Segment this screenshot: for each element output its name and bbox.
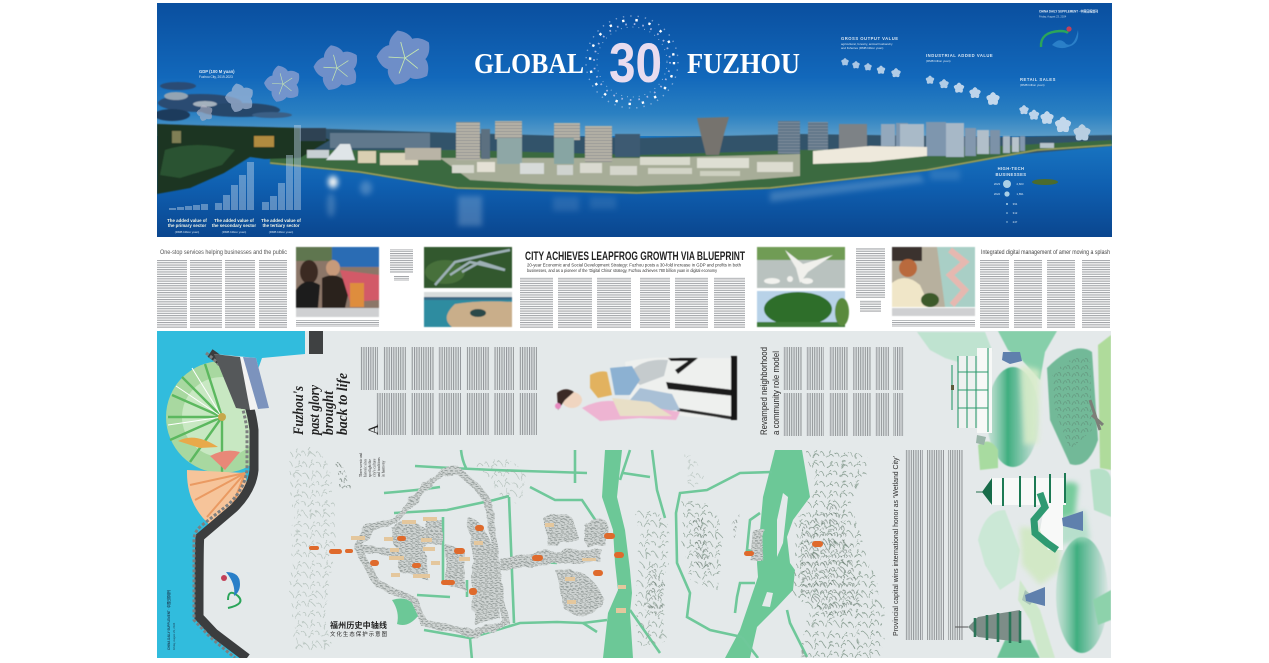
heading: past glory: Fuzhou's xyxy=(291,386,307,436)
wall gate tower xyxy=(309,331,323,354)
gross output value: GROSS OUTPUT VALUE xyxy=(841,36,899,41)
mountains xyxy=(290,448,885,658)
green umbrella xyxy=(166,362,250,472)
photo: coastline xyxy=(424,292,512,327)
bar chart captions: (RMB billion yuan) xyxy=(175,230,199,234)
GDP flower chart xyxy=(196,30,430,121)
subheading: 20-year Economic and Social Development Strategy: Fuzhou posts a 30-fold increase in GDP and profits in both xyxy=(527,262,742,268)
sky xyxy=(157,3,1112,138)
GDP label: GDP (100 M yuan) xyxy=(199,69,235,74)
panel: illustrated map page xyxy=(157,331,1111,660)
bar chart captions xyxy=(167,218,301,234)
quote right xyxy=(856,248,885,312)
bar chart captions: The added value of xyxy=(167,218,207,223)
masthead and logo: Friday, August 23, 2024 xyxy=(1039,14,1067,18)
illustration: two women in hanfu xyxy=(555,356,737,421)
tower blocks centre xyxy=(452,121,640,175)
bar chart captions: the tertiary sector xyxy=(262,223,300,228)
article left: One-stop services helping businesses and the public xyxy=(160,249,287,256)
subheading: businesses, and as a pioneer of the ‘Digital China’ strategy, Fuzhou achieves 780 billion yuan in digital economy xyxy=(527,268,718,273)
gross output value: and fisheries (RMB billion yuan) xyxy=(841,46,883,50)
crown tower xyxy=(697,117,729,155)
title: GLOBAL xyxy=(474,48,584,80)
bar chart captions: The added value of xyxy=(214,218,254,223)
fireworks ring xyxy=(586,16,678,108)
heading: past glory: brought xyxy=(321,390,337,435)
high-tech businesses: 2022 xyxy=(994,192,1001,196)
panel: middle newspaper strip xyxy=(157,247,1110,328)
title xyxy=(475,54,800,74)
islet xyxy=(1032,179,1058,185)
page background xyxy=(157,331,1111,658)
retail sales xyxy=(1019,77,1092,143)
heading: revamped neighborhood xyxy=(759,347,781,435)
article right: Integrated digital management of amer moving a splash xyxy=(981,249,1110,256)
heading: past glory xyxy=(291,372,351,437)
retail sales: (RMB billion yuan) xyxy=(1020,83,1045,87)
high-tech businesses: 247 xyxy=(1013,220,1018,224)
roads xyxy=(384,450,807,660)
high-tech businesses: BUSINESSES xyxy=(996,172,1026,177)
soft green hills xyxy=(917,332,992,380)
wave wall xyxy=(1034,493,1063,550)
white pagoda xyxy=(976,473,1066,507)
GDP label: Fuzhou City, 2019-2023 xyxy=(199,75,233,79)
bar charts xyxy=(169,125,301,210)
30: 30 xyxy=(609,31,662,94)
high-tech businesses: 2,603 xyxy=(1016,182,1024,186)
photo: painting workshop xyxy=(892,247,975,316)
masthead and logo: CHINA DAILY SUPPLEMENT · 中国日报增刊 xyxy=(1039,8,1099,14)
standfirst: Three scenic and xyxy=(359,452,363,477)
article: revamped neighborhood xyxy=(783,347,904,436)
photo: banyan tree xyxy=(757,291,849,327)
left hillside xyxy=(157,124,330,194)
bar chart captions: The added value of xyxy=(261,218,301,223)
blue place labels xyxy=(1002,352,1083,606)
bar chart captions: (RMB billion yuan) xyxy=(222,230,246,234)
terraces and east towers xyxy=(640,121,1054,176)
drop capital: A xyxy=(366,424,382,435)
terrace base xyxy=(440,154,800,186)
city photo layer xyxy=(154,82,1112,194)
gross output value: agricultural, forestry, animal husbandry xyxy=(841,42,893,46)
masthead and logo xyxy=(1039,8,1099,48)
orange place tags xyxy=(309,525,823,620)
photo caption left xyxy=(296,320,379,327)
land behind the shoreline xyxy=(270,140,1112,194)
heading: past glory: past glory xyxy=(307,385,323,437)
grey pagoda xyxy=(955,610,1020,643)
heading: revamped neighborhood: Revamped neighborhood xyxy=(759,347,769,435)
title: FUZHOU xyxy=(687,48,800,80)
bar chart captions: the primary sector xyxy=(168,223,206,228)
rivers xyxy=(602,450,633,658)
GDP label xyxy=(199,69,235,79)
article left xyxy=(157,249,287,328)
map title: 文化生态保护示意图 xyxy=(330,630,387,638)
map title: 福州历史中轴线 xyxy=(330,620,387,630)
industrial added value xyxy=(925,53,1001,106)
map xyxy=(290,448,885,660)
water xyxy=(157,136,1112,237)
high-tech businesses: 312 xyxy=(1013,211,1018,215)
standfirst: spotlight the xyxy=(368,459,372,477)
city urban texture xyxy=(357,470,610,633)
white pavilion xyxy=(951,348,992,433)
city wall xyxy=(199,353,254,658)
park pond xyxy=(392,599,418,625)
big tree xyxy=(1047,348,1098,465)
heading: past glory: back to life xyxy=(335,372,351,435)
high-tech businesses: 2023 xyxy=(994,182,1001,186)
subheading xyxy=(527,262,742,273)
article: wetland city xyxy=(905,450,963,640)
map title xyxy=(330,620,387,638)
tan place tags xyxy=(351,517,626,613)
photo: winding road xyxy=(424,247,512,288)
industrial added value: (RMB billion yuan) xyxy=(926,59,951,63)
standfirst xyxy=(359,452,386,477)
quote left xyxy=(390,249,413,281)
high-tech businesses xyxy=(994,166,1026,224)
photo caption right xyxy=(892,320,975,327)
reflections xyxy=(327,170,960,226)
standfirst: city's culture xyxy=(372,458,376,477)
vertical masthead: CHINA DAILY SUPPLEMENT · 中国日报增刊 xyxy=(166,590,171,650)
gross output value xyxy=(841,36,901,78)
article right xyxy=(980,249,1110,328)
far shore xyxy=(157,124,1112,156)
article: past glory xyxy=(360,347,537,435)
wetland landscape xyxy=(917,331,1111,658)
exhibition centre xyxy=(813,146,927,164)
standfirst: and traditions xyxy=(377,457,381,477)
heading: wetland city: Provincial capital wins international honor as ‘Wetland City’ xyxy=(891,456,900,636)
standfirst: in harmony xyxy=(382,460,386,477)
high-tech businesses: 391 xyxy=(1013,202,1018,206)
high-tech businesses: 1,891 xyxy=(1016,192,1024,196)
photo: stall visitors xyxy=(296,247,379,317)
umbrellas xyxy=(166,362,250,524)
vertical masthead: Friday, August 23, 2024 xyxy=(172,622,176,650)
headline article columns xyxy=(520,277,745,328)
high-tech businesses: HIGH-TECH xyxy=(998,166,1024,171)
bar chart captions: the secondary sector xyxy=(212,223,256,228)
shore bank xyxy=(270,145,1112,193)
logo xyxy=(221,572,240,608)
industrial added value: INDUSTRIAL ADDED VALUE xyxy=(926,53,993,58)
panel: skyline banner xyxy=(154,3,1112,237)
photo: egrets xyxy=(757,247,845,288)
heading: revamped neighborhood: a community role model xyxy=(771,351,781,435)
bar chart captions: (RMB billion yuan) xyxy=(269,230,293,234)
orange umbrella xyxy=(187,470,250,527)
blue water field xyxy=(157,331,317,658)
clouds xyxy=(154,82,292,121)
retail sales: RETAIL SALES xyxy=(1020,77,1056,82)
standfirst: historic sites xyxy=(364,458,368,477)
left low-rise district xyxy=(172,128,441,165)
vertical masthead xyxy=(166,590,176,650)
headline: CITY ACHIEVES LEAPFROG GROWTH VIA BLUEPRINT xyxy=(525,249,745,263)
blue and white tiles xyxy=(214,354,258,410)
